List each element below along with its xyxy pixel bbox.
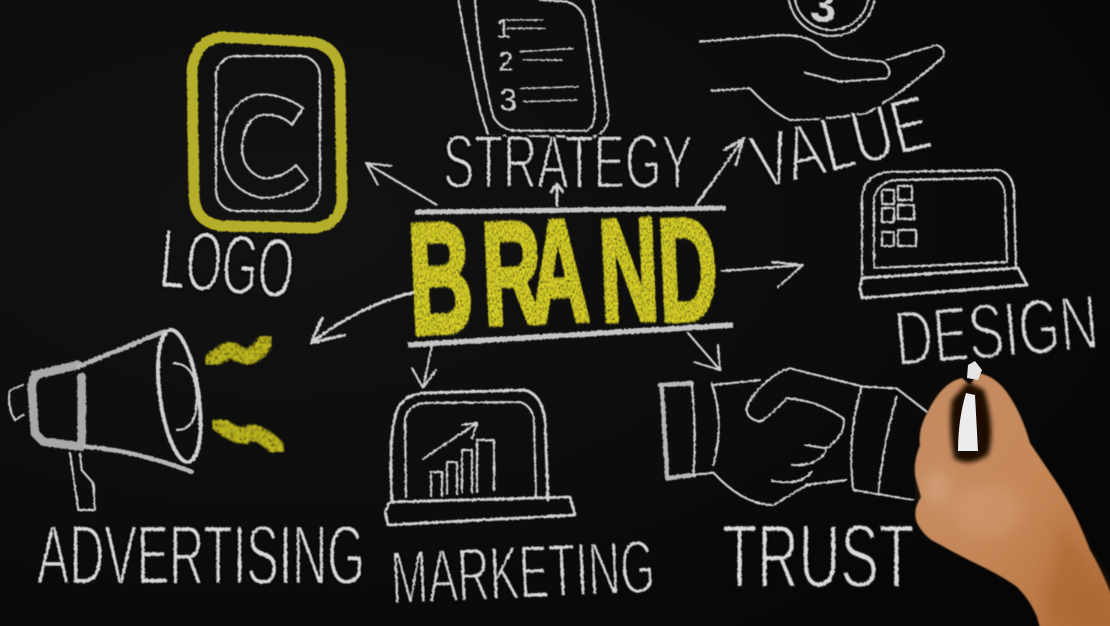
hand <box>915 373 1110 626</box>
arrow to design <box>722 262 803 287</box>
checklist lines <box>507 20 578 102</box>
label: ADVERTISING: ADVERTISING <box>37 508 365 602</box>
checklist number 1: 1 <box>496 13 511 43</box>
label: TRUST: TRUST <box>722 507 914 607</box>
megaphone bell <box>151 327 208 465</box>
megaphone back <box>32 365 82 447</box>
knuckle highlight <box>925 470 949 506</box>
icon: design laptop <box>860 170 1027 298</box>
open hand <box>700 35 944 120</box>
megaphone mouthpiece <box>9 385 23 420</box>
left sleeve band <box>692 383 719 475</box>
chalk tip <box>967 361 982 380</box>
icon: strategy clipboard <box>458 0 608 137</box>
heading: BRAND: A <box>526 189 592 355</box>
arrow to marketing <box>412 345 436 388</box>
brand top rule <box>415 208 726 212</box>
left cuff <box>660 383 693 478</box>
label: MARKETING: MARKETING <box>389 525 656 621</box>
bar chart <box>431 440 494 496</box>
hand holding chalk <box>915 361 1110 626</box>
icon: megaphone <box>9 327 208 510</box>
checklist number 2: 2 <box>498 47 513 77</box>
label: LOGO: LOGO <box>156 211 298 318</box>
hand grip shadow <box>950 382 991 462</box>
laptop outer shell <box>862 170 1016 275</box>
logo letter C <box>222 95 308 198</box>
right sleeve band <box>851 387 913 500</box>
icon: handshake <box>660 368 927 505</box>
back of hand highlight <box>949 484 1021 536</box>
arrow to trust <box>688 333 720 370</box>
chalk stick <box>958 393 978 451</box>
megaphone inner arc <box>173 363 197 430</box>
arrow to strategy <box>551 184 563 205</box>
arrow to logo <box>366 163 437 205</box>
clipboard outer <box>458 0 608 137</box>
megaphone handle <box>70 453 95 510</box>
app grid <box>882 186 916 246</box>
megaphone cone <box>78 332 192 472</box>
growth arrow <box>423 423 477 459</box>
laptop outer <box>391 390 548 500</box>
label: VALUE: VALUE <box>743 78 939 206</box>
heading: BRAND: B <box>405 189 476 369</box>
heading: BRAND: R <box>479 192 545 357</box>
shaking hands <box>713 368 927 505</box>
arrow to value <box>696 138 744 205</box>
laptop inner <box>405 402 536 497</box>
sound wave bottom <box>217 422 279 450</box>
coin <box>788 0 875 36</box>
laptop base <box>385 497 575 525</box>
laptop screen <box>874 178 1007 268</box>
sound wave top <box>210 338 267 363</box>
heading: BRAND: D <box>655 188 721 353</box>
icon: marketing laptop <box>385 390 575 525</box>
brand bottom rule <box>408 325 733 345</box>
clipboard inner <box>475 0 595 131</box>
heading: BRAND: N <box>596 188 662 354</box>
wrist shading <box>1045 520 1110 626</box>
coin inner ring <box>794 0 869 30</box>
checklist number 3: 3 <box>499 82 517 118</box>
label: STRATEGY: STRATEGY <box>443 120 693 205</box>
laptop base <box>860 268 1027 298</box>
icon: hand holding coin <box>700 0 944 120</box>
logo yellow frame <box>192 37 342 228</box>
logo inner outline <box>216 56 320 211</box>
arrow to advertising <box>311 292 415 343</box>
icon: copyright logo <box>192 37 342 228</box>
